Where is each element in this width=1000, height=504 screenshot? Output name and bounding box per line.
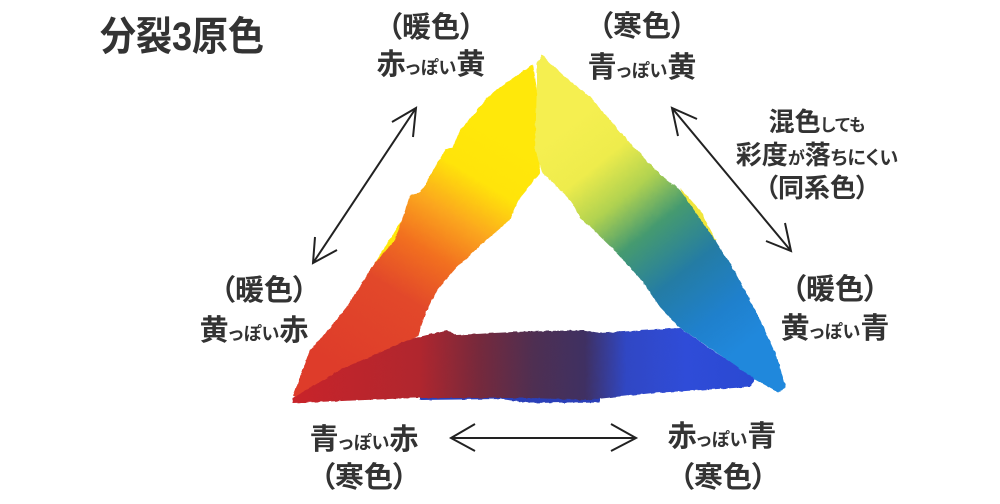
label: cool reddish blue: （寒色） (679, 461, 767, 494)
label: cool bluish yellow: 青っぽい黄 (588, 51, 696, 84)
title: 分裂3原色 (100, 15, 264, 59)
note: saturation stays high (736, 107, 898, 203)
label: warm yellowish red: 黄っぽい赤 (200, 314, 308, 347)
arrow: cool yellow to warm blue (672, 108, 791, 251)
paint stroke: red to yellow (293, 64, 540, 400)
label: cool bluish yellow: （寒色） (598, 10, 686, 43)
paint triangle (293, 55, 786, 403)
paint stroke: red to blue (293, 328, 755, 403)
label: cool bluish red: 青っぽい赤 (310, 423, 418, 456)
label: warm yellowish red: （暖色） (220, 274, 308, 307)
note: saturation stays high: 混色しても (769, 107, 865, 137)
label: warm reddish yellow (377, 11, 485, 81)
label: cool bluish yellow (588, 10, 696, 84)
label: warm reddish yellow: 赤っぽい黄 (377, 48, 485, 81)
arrow: warm yellow to warm red (313, 108, 416, 263)
label: cool reddish blue (668, 420, 776, 494)
label: cool reddish blue: 赤っぽい青 (668, 420, 776, 453)
arrow: cool red to cool blue (451, 424, 636, 451)
note: saturation stays high: 彩度が落ちにくい (736, 140, 898, 170)
label: cool bluish red (310, 423, 418, 494)
label: warm yellowish blue (781, 273, 889, 345)
paint stroke: yellow to blue (535, 55, 786, 392)
label: warm yellowish blue: （暖色） (791, 273, 879, 306)
label: cool bluish red: （寒色） (320, 461, 408, 494)
label: warm reddish yellow: （暖色） (387, 11, 475, 44)
label: warm yellowish red (200, 274, 308, 347)
label: warm yellowish blue: 黄っぽい青 (781, 312, 889, 345)
note: saturation stays high: （同系色） (765, 173, 869, 203)
